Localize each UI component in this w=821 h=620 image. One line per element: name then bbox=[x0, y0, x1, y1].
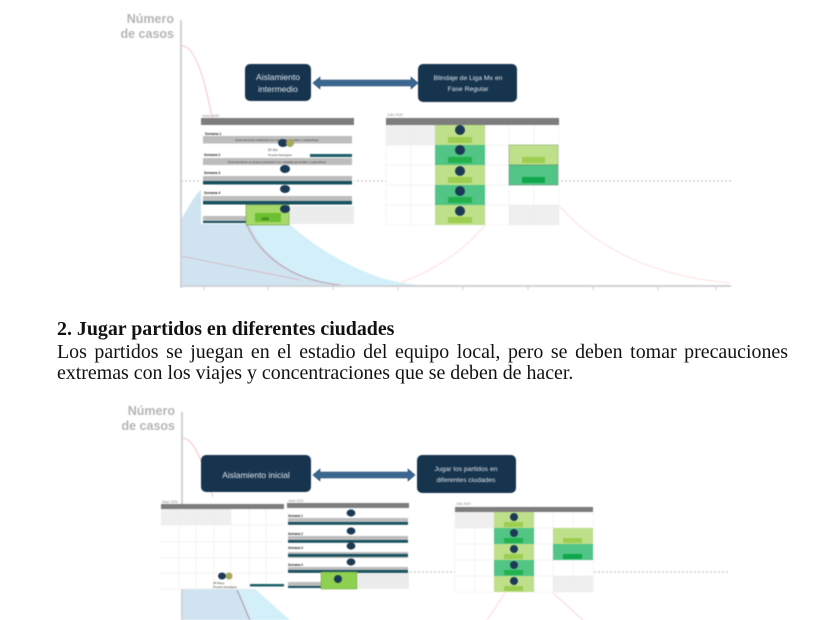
dark curve bbox=[247, 225, 340, 285]
dotted threshold line bbox=[181, 180, 731, 182]
calendar: mayo 2020 bbox=[161, 500, 284, 589]
calendar: mayo 2020: Prueba fisiológica bbox=[213, 585, 237, 589]
red curves bbox=[182, 438, 583, 620]
calendar: julio 2020: Julio 2020 bbox=[387, 113, 403, 117]
calendar: junio 2020: Semana 4 bbox=[288, 563, 303, 567]
calendar: junio 2020: Entrenamiento individual con medidas generales y específicas bbox=[236, 138, 319, 142]
calendar: junio 2020: Prueba fisiológica bbox=[268, 153, 292, 157]
blue area under curve bbox=[236, 588, 290, 620]
calendar: junio 2020: 20 Jun bbox=[268, 148, 278, 152]
calendar: julio 2020 bbox=[386, 113, 559, 225]
calendar: junio 2020: Semana 2 bbox=[288, 532, 303, 536]
calendar: julio 2020: Julio 2020 bbox=[456, 502, 471, 506]
calendar: junio 2020: Semana 1 bbox=[288, 514, 303, 518]
box: blindaje: Fase Regular bbox=[448, 86, 489, 93]
axes bbox=[180, 20, 731, 290]
blue area under curve bbox=[181, 188, 430, 286]
calendar: junio 2020: Semana 1 bbox=[205, 132, 221, 136]
double arrow bbox=[313, 77, 418, 89]
paragraph: extremas con los viajes y concentraciones que se deben de hacer. bbox=[57, 362, 573, 384]
figure 2: epidemic curve with calendars bbox=[122, 405, 728, 620]
calendar: junio 2020 bbox=[201, 114, 354, 225]
y axis label bbox=[120, 12, 174, 41]
dotted threshold line bbox=[410, 571, 730, 573]
y axis label bbox=[122, 405, 175, 430]
paragraph: Los partidos se juegan en el estadio del equipo local, pero se deben tomar precauciones bbox=[57, 341, 788, 363]
y axis label: Número bbox=[127, 12, 174, 26]
y axis bbox=[181, 412, 183, 620]
box: jugar los partidos: diferentes ciudades bbox=[437, 477, 496, 484]
calendar: junio 2020 bbox=[287, 499, 409, 589]
darker blue overlap bbox=[183, 589, 250, 620]
calendar: junio 2020: Semana 4 bbox=[204, 191, 220, 195]
paragraph bbox=[57, 341, 788, 384]
box: aislamiento intermedio: Aislamiento bbox=[256, 72, 300, 82]
calendar: mayo 2020: Mayo 2020 bbox=[162, 500, 178, 504]
darker blue overlap bbox=[181, 188, 335, 286]
calendar: junio 2020: Junio 2020 bbox=[288, 499, 304, 503]
box: aislamiento inicial bbox=[201, 455, 311, 492]
calendar: junio 2020: Semana 3 bbox=[288, 546, 303, 550]
box: aislamiento intermedio bbox=[245, 64, 311, 101]
heading: 2. Jugar partidos en diferentes ciudades bbox=[57, 318, 394, 340]
red curves bbox=[181, 46, 730, 283]
box: blindaje: Blindaje de Liga Mx en bbox=[434, 75, 503, 82]
box: blindaje bbox=[418, 64, 517, 102]
box: jugar los partidos: Jugar los partidos en bbox=[434, 466, 498, 473]
double arrow bbox=[313, 469, 415, 481]
box: jugar los partidos bbox=[417, 455, 516, 493]
calendar: junio 2020: Entrenamiento en grupos pequeños con medidas generales y específicas bbox=[228, 160, 326, 164]
box: aislamiento inicial: Aislamiento inicial bbox=[222, 470, 290, 480]
y axis label: Número bbox=[128, 404, 175, 418]
y axis label: de casos bbox=[121, 419, 175, 433]
calendar: junio 2020: Semana 3 bbox=[204, 171, 220, 175]
calendar: junio 2020: JG3 bbox=[261, 216, 270, 221]
figure 1: epidemic curve with calendars bbox=[120, 12, 732, 290]
calendar: julio 2020 bbox=[455, 502, 593, 592]
declining line bbox=[181, 256, 300, 280]
calendar: junio 2020: Semana 2 bbox=[204, 153, 220, 157]
y axis label: de casos bbox=[120, 27, 174, 41]
calendar: junio 2020: Junio 2020 bbox=[202, 114, 219, 118]
box: aislamiento intermedio: intermedio bbox=[258, 84, 298, 94]
calendar: mayo 2020: 28 Mayo bbox=[213, 581, 225, 585]
dark curve bbox=[237, 590, 250, 620]
